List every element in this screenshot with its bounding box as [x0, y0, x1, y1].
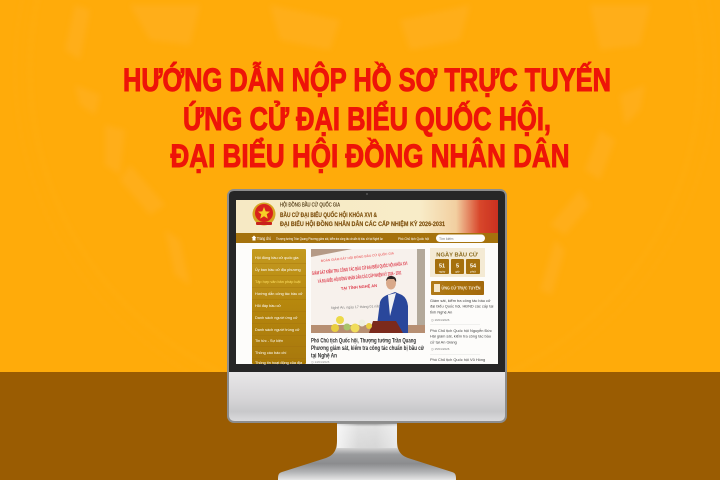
main news headline: Phó Chủ tịch Quốc hội, Thượng tướng Trần Quang — [311, 338, 416, 344]
side news list: ◷ 16/01/2026 — [431, 318, 450, 322]
floor band — [0, 372, 720, 480]
election countdown: 54 — [470, 264, 477, 270]
main news headline — [311, 338, 424, 364]
side news list — [430, 298, 493, 362]
navigation bar: Tìm kiếm — [439, 237, 453, 241]
online candidacy button: ỨNG CỬ TRỰC TUYẾN — [442, 286, 480, 290]
side news list: đại biểu Quốc hội, HĐND các cấp tại — [430, 304, 493, 308]
side news list: ◷ 15/01/2026 — [431, 347, 450, 351]
side news list: Hải giám sát, kiểm tra công tác bầu — [430, 334, 491, 338]
title: ĐẠI BIỂU HỘI ĐỒNG NHÂN DÂN — [170, 138, 570, 174]
header text: HỘI ĐỒNG BẦU CỬ QUỐC GIA — [280, 202, 340, 208]
site header banner — [236, 200, 498, 233]
sidebar menu: Hướng dẫn công tác bầu cử — [255, 291, 303, 296]
sidebar menu: Tin tức - Sự kiện — [255, 339, 283, 343]
election countdown: ngày — [439, 270, 446, 274]
main news headline: ◷ 14/01/2026 — [311, 360, 330, 364]
side news list: cử tại An Giang — [430, 340, 457, 344]
sidebar menu: Thông cáo báo chí — [255, 351, 287, 355]
side news list: Giám sát, kiểm tra công tác bầu cử — [430, 298, 491, 303]
main news photo: VÀ ĐẠI BIỂU HỘI ĐỒNG NHÂN DÂN CÁC CẤP NHIỆM KỲ 2026 - 2031 — [317, 268, 402, 285]
header text: BẦU CỬ ĐẠI BIỂU QUỐC HỘI KHÓA XVI & — [280, 209, 377, 219]
header text: ĐẠI BIỂU HỘI ĐỒNG NHÂN DÂN CÁC CẤP NHIỆM KỲ 2026-2031 — [280, 218, 445, 228]
header text — [280, 202, 445, 228]
election countdown: 51 — [439, 264, 445, 270]
side news list: tỉnh Nghệ An — [430, 310, 452, 314]
main news photo — [311, 249, 425, 333]
title: HƯỚNG DẪN NỘP HỒ SƠ TRỰC TUYẾN — [123, 62, 611, 98]
main news photo: ĐOÀN GIÁM SÁT HỘI ĐỒNG BẦU CỬ QUỐC GIA — [321, 250, 395, 263]
sidebar menu: Hội đồng bầu cử quốc gia — [255, 256, 299, 260]
main news photo: GIÁM SÁT KIỂM TRA CÔNG TÁC BẦU CỬ ĐẠI BIỂU QUỐC HỘI KHÓA XVI — [311, 259, 408, 277]
election countdown: giờ — [455, 270, 460, 274]
sidebar menu — [252, 249, 306, 365]
election countdown: 5 — [456, 264, 459, 270]
sidebar menu: Thông tin hoạt động của địa — [255, 361, 303, 365]
election countdown: phút — [470, 270, 476, 274]
main news photo: Nghệ An, ngày 17 tháng 01 năm 2026 — [331, 304, 390, 310]
side news list: Phó Chủ tịch Quốc hội Nguyễn Đức — [430, 328, 492, 333]
sidebar menu: Danh sách người ứng cử — [255, 316, 298, 320]
navigation bar — [236, 233, 498, 243]
online candidacy button — [431, 281, 484, 295]
main news headline: Phương giám sát, kiểm tra công tác chuẩn bị bầu cử — [311, 345, 424, 352]
main news headline: tại Nghệ An — [311, 354, 337, 360]
speaker — [376, 276, 408, 333]
website screen — [236, 200, 498, 365]
navigation bar: Thượng tướng Trần Quang Phương giám sát, kiểm tra công tác chuẩn bị bầu cử tại Nghệ An — [276, 237, 383, 241]
main news photo: TẠI TỈNH NGHỆ AN — [341, 283, 377, 291]
monitor body — [227, 189, 507, 423]
navigation bar: Trang chủ — [257, 235, 271, 241]
sidebar menu: Tập hợp văn bản pháp luật — [255, 280, 302, 284]
title: ỨNG CỬ ĐẠI BIỂU QUỐC HỘI, — [183, 101, 551, 137]
side news list: Phó Chủ tịch Quốc hội Vũ Hồng — [430, 357, 485, 362]
election countdown — [430, 248, 485, 277]
sidebar menu: Danh sách người trúng cử — [255, 328, 300, 332]
national emblem — [252, 202, 276, 226]
sidebar menu: Hỏi đáp bầu cử — [255, 304, 281, 308]
sidebar menu: Ủy ban bầu cử địa phương — [255, 267, 301, 272]
title — [123, 62, 611, 174]
navigation bar: Phó Chủ tịch Quốc hội — [398, 237, 429, 241]
lectern and flowers — [331, 316, 403, 333]
election countdown: NGÀY BẦU CỬ — [436, 252, 478, 258]
monitor stand — [278, 422, 456, 480]
